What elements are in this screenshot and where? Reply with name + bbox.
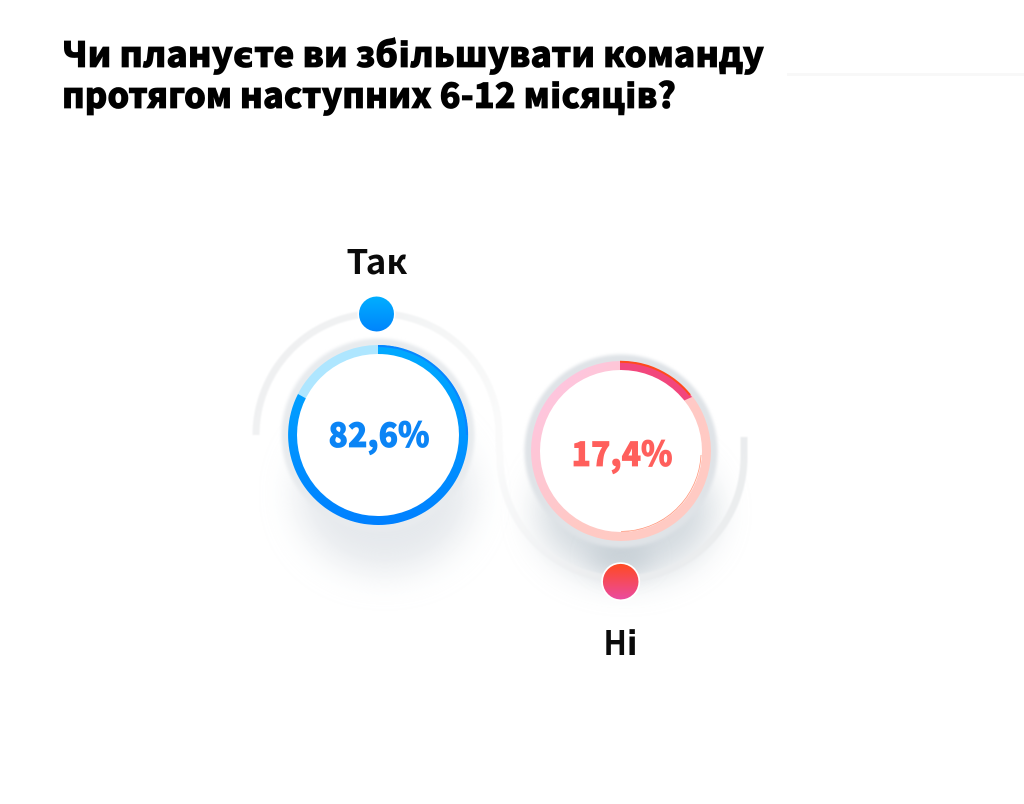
marker dot: red [601, 562, 640, 601]
inner orange hairline [621, 455, 701, 532]
label: Так: Так [346, 235, 408, 284]
halo ring [282, 338, 474, 532]
connecting S-shaped track [256, 314, 744, 579]
orange outer edge [620, 362, 690, 395]
gauge: Так 82,6% [282, 338, 474, 532]
marker dot: blue [358, 295, 396, 333]
title [62, 27, 764, 119]
soft shadows beneath circles [297, 416, 714, 578]
top right divider stroke [787, 73, 1024, 76]
white centre [540, 370, 702, 532]
gauge: Ні 17,4% [524, 354, 718, 548]
value: 17,4% [572, 427, 672, 476]
label: Ні: Ні [604, 616, 638, 665]
progress arc [620, 361, 692, 401]
base ring [536, 366, 706, 536]
dark outer edge [378, 346, 467, 435]
progress arc [288, 345, 468, 525]
value: 82,6% [328, 408, 430, 457]
halo ring [524, 354, 718, 548]
light remainder arc [293, 350, 463, 520]
title: Чи плануєте ви збільшувати команду [62, 27, 764, 78]
title: протягом наступних 6-12 місяців? [62, 68, 676, 119]
white centre [297, 354, 459, 516]
